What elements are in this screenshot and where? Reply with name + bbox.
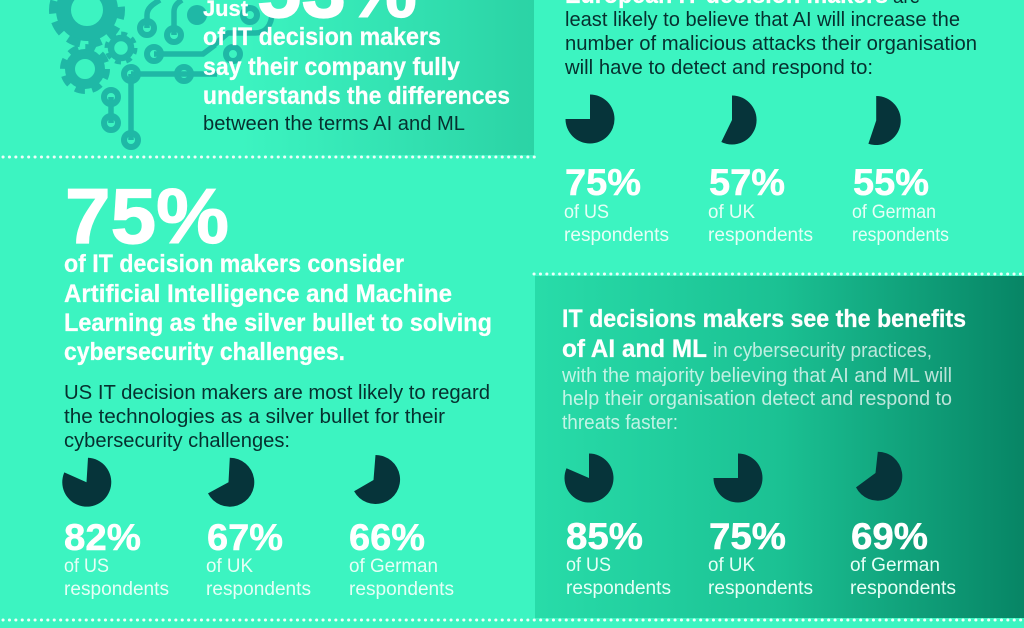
text block: benefits statement: threats faster: <box>562 412 678 434</box>
stat: 66% of German respondents: 66% <box>349 517 425 558</box>
stat: 85% of US respondents: respondents <box>566 578 671 599</box>
text block: malicious attacks statement: least likely to believe that AI will increase the <box>565 9 960 31</box>
big stat: 75%: 75% <box>65 172 229 260</box>
stat: 55% of German respondents: of German <box>852 202 936 223</box>
stat: 85% of US respondents: of US <box>566 555 611 576</box>
text block: benefits statement: in cybersecurity practices, <box>713 340 932 362</box>
panel: European decision makers least likely <box>564 0 977 246</box>
stat: 69% of German respondents: respondents <box>850 578 956 599</box>
pie chart: 57% of UK <box>721 95 757 144</box>
pie chart: 85% of US <box>564 454 613 502</box>
stat: 85% of US respondents: 85% <box>566 516 643 557</box>
text block: understanding statement <box>203 23 510 135</box>
stat: 75% of US respondents: of US <box>564 202 609 223</box>
stat: 66% of German respondents <box>349 517 454 600</box>
pie chart: 55% of Germany <box>868 96 901 145</box>
text block: US most likely <box>64 382 490 452</box>
text block: US most likely: US IT decision makers are most likely to regard <box>64 382 490 404</box>
panel: silver bullet <box>62 172 492 600</box>
stat: 82% of US respondents: respondents <box>64 579 169 600</box>
stat: 69% of German respondents <box>850 516 956 599</box>
text block: silver bullet heading <box>64 250 492 366</box>
stat: 82% of US respondents <box>64 517 169 600</box>
text block: benefits statement <box>561 305 966 434</box>
text block: benefits statement: of AI and ML <box>562 335 707 363</box>
stat: 55% of German respondents: respondents <box>852 225 949 246</box>
stat: 75% of UK respondents: of UK <box>708 555 755 576</box>
icon: gears and circuit <box>53 0 272 147</box>
pie chart: 69% of Germany <box>856 452 902 501</box>
text block: malicious attacks statement: number of malicious attacks their organisation <box>565 33 977 55</box>
stat: 82% of US respondents: of US <box>64 556 109 577</box>
text block: silver bullet heading: of IT decision makers consider <box>64 250 404 278</box>
stat: 67% of UK respondents: respondents <box>206 579 311 600</box>
text block: benefits statement: with the majority believing that AI and ML will <box>561 365 952 387</box>
text block: understanding statement: say their company fully <box>203 53 460 81</box>
stat: 57% of UK respondents <box>708 162 813 246</box>
stat: 85% of US respondents <box>566 516 671 599</box>
stat: 67% of UK respondents <box>206 517 311 600</box>
stat: 57% of UK respondents: respondents <box>708 225 813 246</box>
text block: silver bullet heading: Learning as the silver bullet to solving <box>64 309 492 337</box>
pie chart: 67% of UK <box>208 458 254 507</box>
pie chart: 75% of UK <box>714 454 762 502</box>
text block: understanding statement: of IT decision makers <box>203 23 441 51</box>
text block: US most likely: cybersecurity challenges: <box>64 430 290 452</box>
stat: 57% of UK respondents: of UK <box>708 202 755 223</box>
text block: silver bullet heading: Artificial Intelligence and Machine <box>64 280 452 308</box>
stat: 82% of US respondents: 82% <box>64 517 141 558</box>
pie chart: 66% of Germany <box>354 455 400 504</box>
text block: US most likely: the technologies as a silver bullet for their <box>64 406 445 428</box>
stat: 55% of German respondents: 55% <box>853 162 929 203</box>
panel: 53 percent understand the terms <box>1 0 534 155</box>
stat: 75% of US respondents: respondents <box>564 225 669 246</box>
text block: silver bullet heading: cybersecurity challenges. <box>64 338 345 366</box>
text block: benefits statement: help their organisation detect and respond to <box>562 388 952 410</box>
panel: benefits of AI and ML <box>535 276 1024 618</box>
stat: 69% of German respondents: of German <box>850 555 940 576</box>
stat: 75% of UK respondents: respondents <box>708 578 813 599</box>
text block: understanding statement: understands the differences <box>203 82 510 110</box>
stat: 67% of UK respondents: of UK <box>206 556 253 577</box>
stat: 75% of US respondents: 75% <box>565 162 641 203</box>
stat: 75% of US respondents <box>564 162 669 246</box>
stat: 75% of UK respondents <box>708 516 813 599</box>
text block: understanding statement: between the terms AI and ML <box>203 113 465 135</box>
pie chart: 75% of US <box>566 94 614 144</box>
stat: 66% of German respondents: of German <box>349 556 438 577</box>
stat: 57% of UK respondents: 57% <box>709 162 785 203</box>
stat: 75% of UK respondents: 75% <box>709 516 786 557</box>
text block: malicious attacks statement <box>564 0 977 79</box>
text block: malicious attacks statement: will have to detect and respond to: <box>564 57 873 79</box>
text block: benefits statement: IT decisions makers see the benefits <box>562 305 966 333</box>
stat: 69% of German respondents: 69% <box>851 516 928 557</box>
stat: 55% of German respondents <box>852 162 949 246</box>
stat: 66% of German respondents: respondents <box>349 579 454 600</box>
pie chart: 82% of US <box>62 458 111 507</box>
stat: 67% of UK respondents: 67% <box>207 517 283 558</box>
